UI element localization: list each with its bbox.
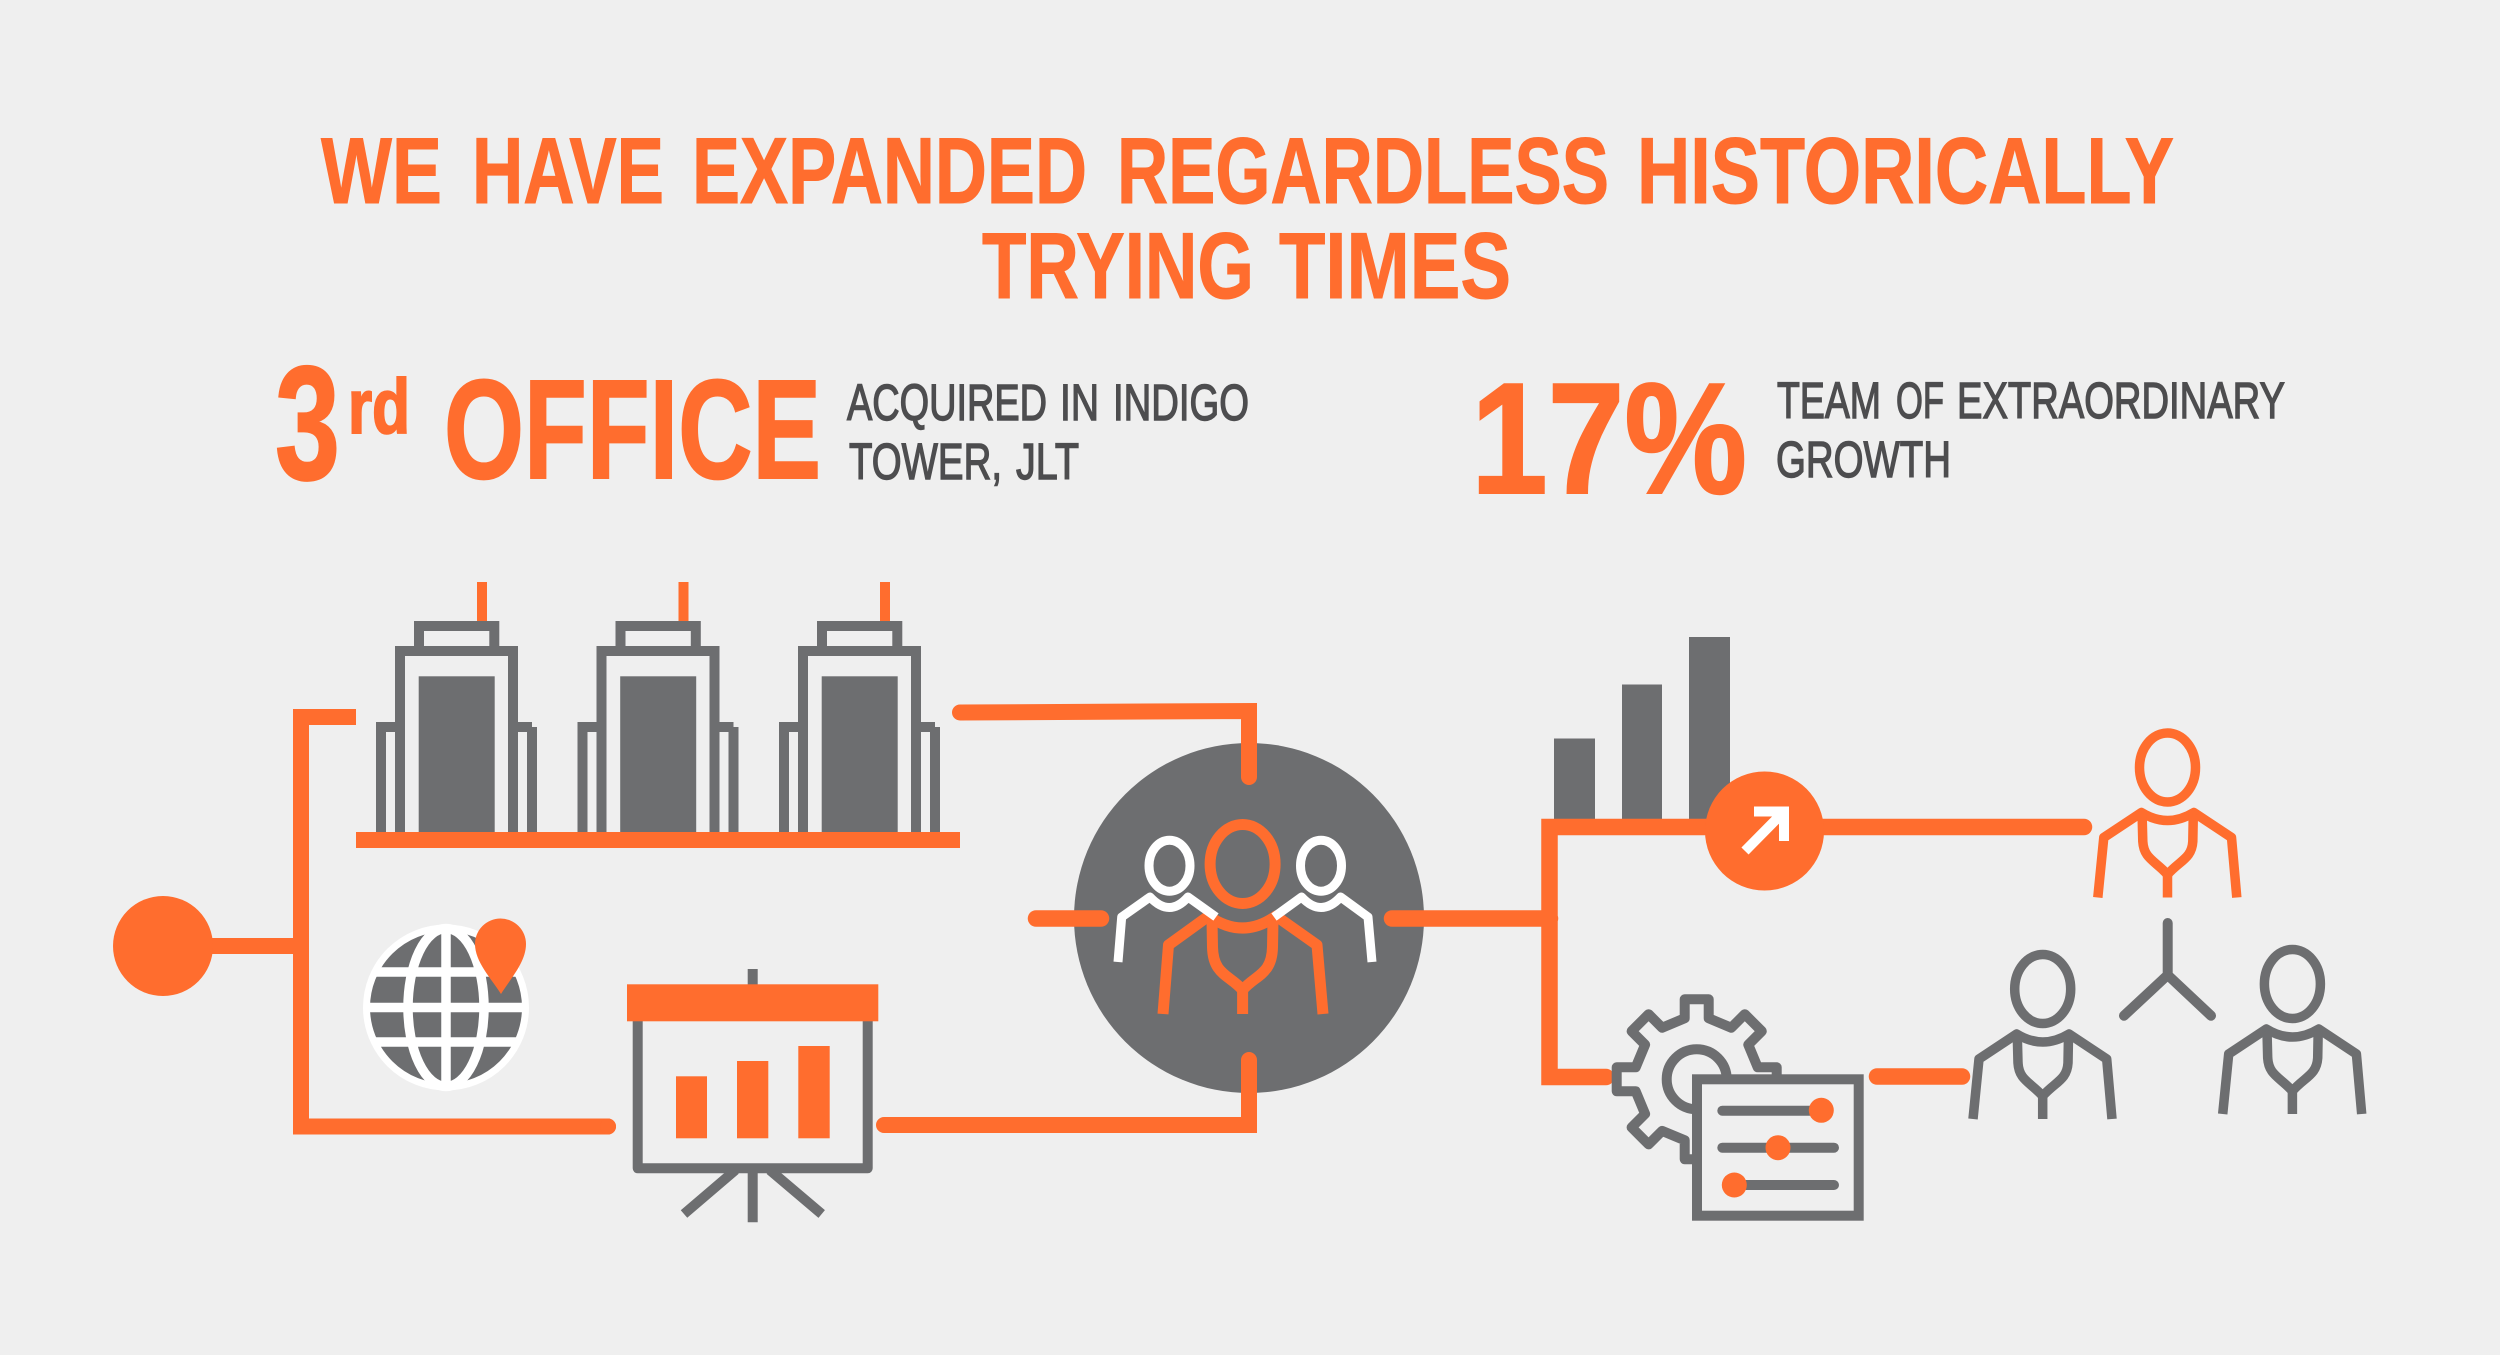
icon: presentation board [627,969,878,1222]
title [321,118,2174,318]
icon: team left person [1118,840,1216,962]
title: WE [321,118,442,223]
text: acquired in Indigo Tower: JLT [1016,433,1079,490]
buildings [356,582,960,848]
title: TIMES [1279,213,1511,318]
text: team of extraordinary growth: TEAM [1777,372,1881,429]
central circle [1074,743,1424,1093]
connector: right branch [1392,827,2084,1077]
text: team of extraordinary growth: GROWTH [1776,431,1951,488]
text: acquired in Indigo Tower: TOWER, [849,433,1002,490]
icon: building 1 [381,582,532,832]
shelf [356,832,960,848]
connector: panel to people [1877,1068,1962,1085]
icon: building 2 [582,582,734,832]
bar chart: growth [1554,637,1730,821]
text: team of extraordinary growth: EXTRAORDINARY [1957,372,2285,429]
stat: 3rd office: OFFICE [444,350,821,508]
icon: settings panel [1697,1079,1859,1216]
stat: 3rd office [275,333,821,514]
text: acquired in Indigo Tower: ACQUIRED [847,374,1047,431]
icon: gear [1617,999,1777,1159]
icon: gray person left [1973,954,2112,1119]
stat: 3rd office: 3 [275,333,340,514]
title: EXPANDED [692,118,1087,223]
icon: orange person [2098,733,2237,898]
icon: building 3 [784,582,935,832]
title: TRYING [982,213,1254,318]
stat: 3rd office: rd [348,364,410,450]
text: team of extraordinary growth [1776,372,2285,488]
icon: team centre person [1163,824,1323,1014]
text: acquired in Indigo Tower: INDIGO [1113,374,1249,431]
text: acquired in Indigo Tower: IN [1060,374,1099,431]
connector: left branch [212,717,608,1126]
connector: building to circle [960,711,1249,777]
text: acquired in Indigo Tower [847,374,1249,490]
connector: board to circle [884,1060,1249,1125]
icon: globe with pin [366,918,526,1087]
icon: hierarchy connector [2124,923,2211,1016]
icon: gray person right [2223,950,2362,1114]
connector: bottom-left end [600,1118,616,1134]
text: team of extraordinary growth: OF [1896,372,1944,429]
title: HAVE [472,118,664,223]
icon: growth arrow circle [1705,772,1824,890]
icon: team right person [1274,840,1372,962]
start dot [113,896,213,996]
title: HISTORICALLY [1637,118,2174,223]
stat: 17%: 17% [1471,351,1747,527]
connector: left stub [1036,910,1101,927]
title: REGARDLESS [1117,118,1609,223]
